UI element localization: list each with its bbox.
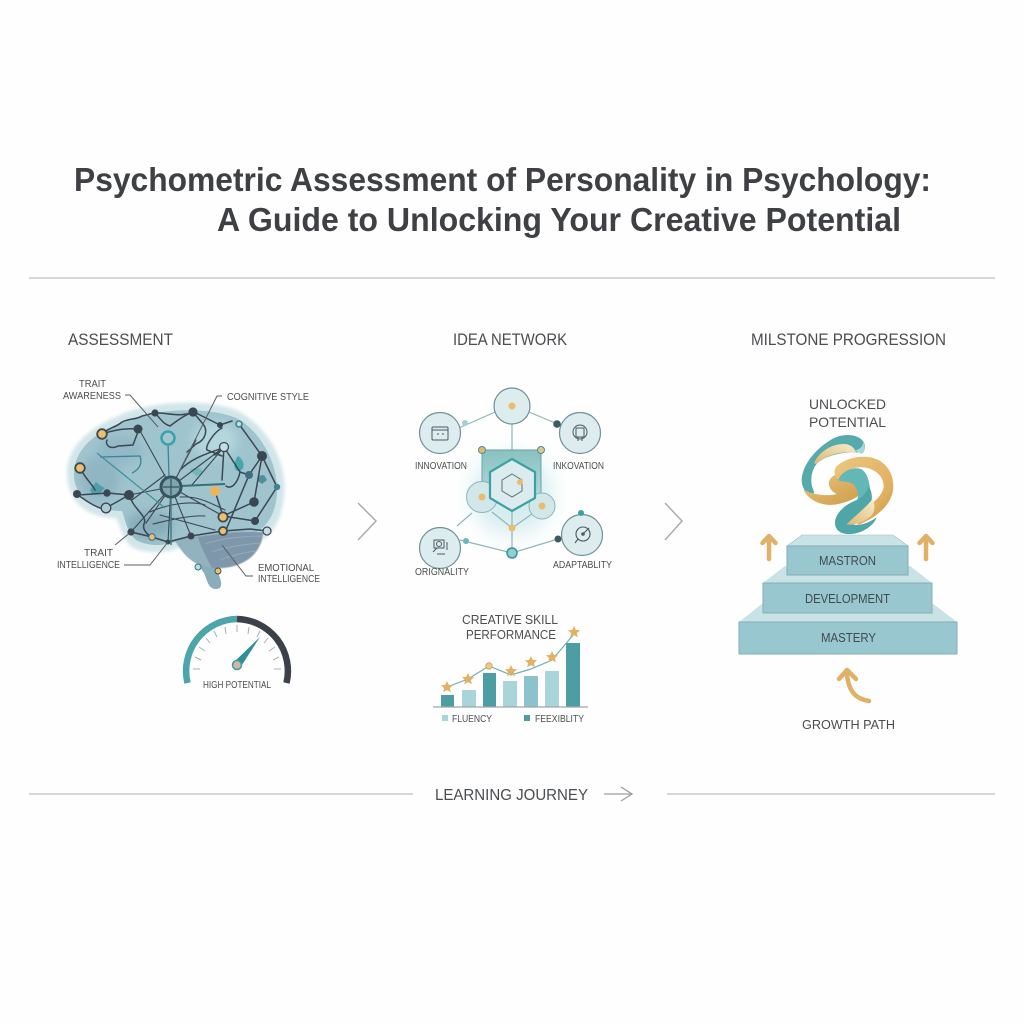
label: cognitive style: COGNITIVE STYLE <box>227 392 309 403</box>
icon: ribbon knot <box>802 435 893 534</box>
chart legend: FEEXIBLITY <box>535 714 584 725</box>
label: emotional intelligence <box>222 545 320 585</box>
central hexagon <box>490 459 535 511</box>
side node right <box>529 493 555 519</box>
title: Psychometric Assessment of Personality in Psychology: <box>74 161 931 198</box>
label: trait intelligence: INTELLIGENCE <box>57 560 120 571</box>
node: innovation right <box>553 412 604 472</box>
label: unlocked potential: POTENTIAL <box>809 414 886 430</box>
brain stem <box>192 555 221 589</box>
label: growth path: GROWTH PATH <box>802 717 895 732</box>
pyramid: top tier <box>787 535 908 575</box>
arrow: chevron two <box>665 503 682 540</box>
panel: idea network <box>415 331 612 725</box>
pyramid: bottom tier <box>739 603 957 654</box>
arrow: up left <box>762 536 776 559</box>
title: A Guide to Unlocking Your Creative Potential <box>217 201 901 238</box>
arrow: growth path <box>839 670 869 701</box>
top node <box>494 388 530 424</box>
chart legend: FLUENCY <box>452 714 492 725</box>
brain body <box>74 410 277 545</box>
glowing patches <box>234 456 244 471</box>
gauge: high potential: HIGH POTENTIAL <box>203 680 271 691</box>
label: unlocked potential <box>809 396 886 430</box>
node: originality: ORIGNALITY <box>415 567 469 578</box>
infographic canvas <box>29 167 995 802</box>
straight network lines <box>129 429 225 542</box>
network diagram <box>415 388 612 578</box>
organic gyri <box>78 412 277 542</box>
label: trait awareness: AWARENESS <box>63 391 121 402</box>
label: emotional intelligence: EMOTIONAL <box>258 563 314 574</box>
label: trait awareness <box>63 379 158 427</box>
node: innovation left: INNOVATION <box>415 461 467 472</box>
node: adaptability: ADAPTABLITY <box>553 560 612 571</box>
brain nodes <box>73 407 280 544</box>
arrow: up right <box>920 536 932 559</box>
gauge: high potential <box>186 619 288 691</box>
label: learning journey: LEARNING JOURNEY <box>435 787 588 804</box>
heading: idea network: IDEA NETWORK <box>453 331 567 349</box>
node: innovation left <box>415 412 467 472</box>
pyramid: bottom tier: MASTERY <box>821 631 877 645</box>
arrow: learning journey <box>604 787 632 801</box>
node: originality <box>415 528 469 578</box>
label: cognitive style <box>180 392 309 470</box>
arrow: chevron one <box>358 503 376 540</box>
label: trait awareness: TRAIT <box>79 379 106 390</box>
node: innovation right: INKOVATION <box>553 461 604 472</box>
chart title <box>462 612 558 642</box>
brain network illustration <box>67 403 285 589</box>
chart legend <box>442 714 584 725</box>
chart title: PERFORMANCE <box>466 627 556 642</box>
heading: milestone progression: MILSTONE PROGRESSION <box>751 331 946 349</box>
heading: assessment: ASSESSMENT <box>68 331 173 349</box>
label: emotional intelligence: INTELLIGENCE <box>258 574 320 585</box>
chart title: CREATIVE SKILL <box>462 612 558 627</box>
pyramid: middle tier <box>763 566 932 613</box>
brain shading <box>80 422 237 539</box>
panel: assessment <box>57 331 320 691</box>
bar chart: creative skill performance <box>433 612 588 725</box>
panel: milestone progression <box>739 331 957 732</box>
label: unlocked potential: UNLOCKED <box>809 396 886 412</box>
brain halo <box>67 403 285 552</box>
label: trait intelligence <box>57 532 168 571</box>
node: adaptability <box>553 514 612 571</box>
title <box>74 161 931 238</box>
center shield <box>482 450 541 500</box>
pyramid: top tier: MASTRON <box>819 554 876 568</box>
label: trait intelligence: TRAIT <box>84 548 113 559</box>
side node left <box>466 482 498 512</box>
cerebellum <box>175 532 263 568</box>
inner hexagon <box>502 474 522 497</box>
pyramid: middle tier: DEVELOPMENT <box>805 592 890 606</box>
